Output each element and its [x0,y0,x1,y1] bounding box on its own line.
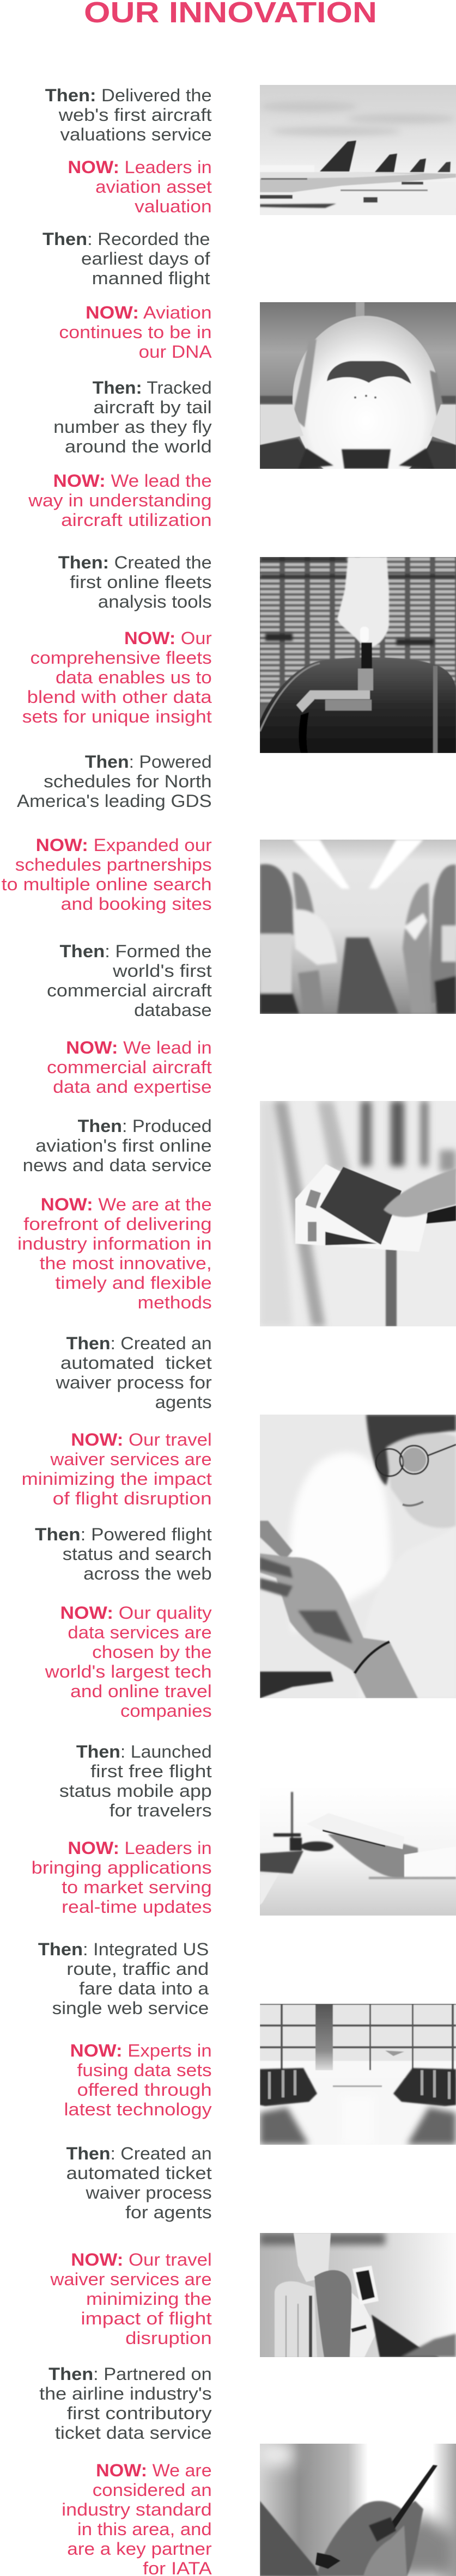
text: then automated ticket waiver process: automated ticket [60,1353,212,1373]
text: then first online news and data service: Then: Produced [78,1116,212,1136]
text: now industry standard key partner for IATA [62,2461,212,2576]
text: then world's first commercial aircraft database: Then: Formed the [60,941,212,961]
text: then earliest days of manned flight [42,229,210,288]
text: now forefront of delivering industry information: the most innovative, [40,1253,212,1273]
text: then tracked aircraft by tail number: around the world [65,437,212,456]
text: now leaders in valuation [68,157,212,216]
text: then first online fleets analysis tools: first online fleets [70,572,212,592]
text: now industry standard key partner for IATA: in this area, and [77,2519,212,2539]
text: then automated ticket waiver process for agents: waiver process [85,2183,212,2202]
text: now comprehensive fleets data: blend with other data [27,687,212,707]
text: now experts fusing data sets: latest technology [64,2100,212,2119]
text: then integrated US route, traffic and fare data: route, traffic and [66,1959,209,1979]
image: airport departure lounge windows [260,2004,456,2145]
text: now travel waiver services minimizing impact: waiver services are [50,2269,212,2289]
text: now quality data services chosen by tech companies: chosen by the [92,1642,212,1662]
text: then earliest days of manned flight: manned flight [92,268,210,288]
text: now leaders in valuation: NOW: Leaders in [68,157,212,177]
text: now way in understanding aircraft utilization: way in understanding [28,491,212,510]
text: then airline industry first contributory ticket data: the airline industry's [39,2384,212,2403]
text: then schedules for North America's GDS: America's leading GDS [17,791,212,811]
text: now industry standard key partner for IATA: industry standard [62,2500,212,2519]
text: now quality data services chosen by tech companies: data services are [68,1623,212,1642]
text: then earliest days of manned flight: Then: Recorded the [42,229,210,249]
text: now bringing applications to market: real-time updates [62,1897,212,1917]
text: then first online news and data service [23,1116,212,1175]
text: then integrated US route, traffic and fare data: fare data into a [79,1979,209,1998]
image: hand holding tablet at desk [260,1791,456,1916]
image: hand lifting suitcase before departures board [260,557,456,753]
text: then integrated US route, traffic and fare data: single web service [52,1998,209,2018]
text: then world's first commercial aircraft database: world's first [112,961,212,981]
text: now aviation in our DNA: NOW: Aviation [86,303,212,322]
text: now expanded schedules partnerships: schedules partnerships [15,855,212,874]
text: then tracked aircraft by tail number [53,378,212,456]
text: now forefront of delivering industry information: industry information in [17,1234,212,1253]
text: now bringing applications to market [32,1838,212,1917]
text: now travel waiver services minimizing impact: NOW: Our travel [71,2250,212,2269]
text: then tracked aircraft by tail number: Then: Tracked [93,378,212,397]
text: now travel waiver services flight disruption: minimizing the impact [22,1469,212,1489]
text: now commercial aircraft data and expertise: data and expertise [53,1077,212,1097]
text: now leaders in valuation: valuation [135,197,212,216]
text: then flight status and search [35,1525,212,1583]
text: now aviation in our DNA: continues to be in [59,322,212,342]
text: now industry standard key partner for IATA: NOW: We are [96,2461,212,2480]
text: then automated ticket waiver process for agents: for agents [125,2202,212,2222]
text: then first free flight status mobile app: status mobile app [59,1781,212,1801]
text: then world's first commercial aircraft database: commercial aircraft [47,981,212,1000]
text: now industry standard key partner for IATA: considered an [93,2480,212,2500]
text: now comprehensive fleets data: data enables us to [56,668,212,687]
text: now travel waiver services flight disruption: NOW: Our travel [71,1430,212,1449]
text: now aviation in our DNA: our DNA [139,342,212,362]
text: now quality data services chosen by tech companies: companies [120,1701,212,1721]
text: then automated ticket waiver process: agents [155,1392,212,1412]
text: now commercial aircraft data and expertise [47,1038,212,1097]
text: now forefront of delivering industry information: NOW: We are at the [41,1195,212,1214]
text: now bringing applications to market: bringing applications [32,1858,212,1877]
text: then flight status and search: status and search [63,1544,212,1564]
text: then automated ticket waiver process for agents: automated ticket [66,2163,212,2183]
text: now leaders in valuation: aviation asset [95,177,212,197]
text: then airline industry first contributory ticket data: ticket data service [55,2423,212,2443]
text: then web's first aircraft valuations: web's first aircraft [58,105,212,125]
text: then first online news and data service: aviation's first online [35,1136,212,1155]
text: now travel waiver services minimizing impact [50,2250,212,2348]
text: now forefront of delivering industry information [17,1195,212,1312]
text: then tracked aircraft by tail number: number as they fly [53,417,212,437]
text: now forefront of delivering industry information: forefront of delivering [23,1214,212,1234]
text: now way in understanding aircraft utilization: NOW: We lead the [53,471,212,491]
image: woman with glasses using a phone [260,1415,456,1698]
text: now bringing applications to market: to market serving [62,1877,212,1897]
text: then web's first aircraft valuations: valuations service [60,125,212,144]
text: now comprehensive fleets data [22,628,212,726]
text: then first free flight status mobile app [59,1742,212,1820]
text: then integrated US route, traffic and fare data [38,1939,209,2018]
text: then schedules for North America's GDS: Then: Powered [85,752,212,772]
text: now experts fusing data sets: offered through [77,2080,212,2100]
text: now bringing applications to market: NOW: Leaders in [68,1838,212,1858]
text: now travel waiver services minimizing impact: disruption [125,2328,212,2348]
text: now quality data services chosen by tech companies: and online travel [70,1681,212,1701]
text: now experts fusing data sets: fusing data sets [77,2060,212,2080]
text: then automated ticket waiver process: waiver process for [55,1373,212,1392]
text: then airline industry first contributory ticket data [39,2364,212,2443]
text: then world's first commercial aircraft database: database [134,1000,212,1020]
text: now comprehensive fleets data: comprehensive fleets [31,648,212,668]
text: now industry standard key partner for IATA: are a key partner [67,2539,212,2559]
text: now way in understanding aircraft utilization [28,471,212,530]
text: then web's first aircraft valuations [45,85,212,144]
text: now aviation in our DNA [59,303,212,362]
text: then flight status and search: Then: Powered flight [35,1525,212,1544]
text: then first online fleets analysis tools: analysis tools [98,592,212,611]
text: now expanded schedules partnerships: to multiple online search [2,874,212,894]
text: then tracked aircraft by tail number: aircraft by tail [93,397,212,417]
image: traveller with suitcase and phone [260,2233,456,2357]
text: now travel waiver services minimizing impact: impact of flight [81,2309,212,2328]
text: then first free flight status mobile app: Then: Launched [76,1742,212,1761]
image: row of parked aircraft tails [260,85,456,215]
text: now forefront of delivering industry information: timely and flexible [55,1273,212,1293]
text: then airline industry first contributory ticket data: Then: Partnered on [48,2364,212,2384]
text: now quality data services chosen by tech companies [45,1603,212,1721]
image: hands using a phone by aircraft window [260,2444,456,2576]
text: then schedules for North America's GDS [17,752,212,811]
text: now experts fusing data sets: NOW: Experts in [70,2041,212,2060]
text: now expanded schedules partnerships: and booking sites [61,894,212,914]
text: then airline industry first contributory ticket data: first contributory [67,2403,212,2423]
text: then integrated US route, traffic and fare data: Then: Integrated US [38,1939,209,1959]
text: now experts fusing data sets [64,2041,212,2119]
text: now expanded schedules partnerships [2,835,212,914]
text: now travel waiver services flight disruption: waiver services are [50,1449,212,1469]
text: now quality data services chosen by tech companies: world's largest tech [45,1662,212,1681]
text: then flight status and search: across the web [83,1564,212,1583]
text: then automated ticket waiver process for agents [66,2144,212,2222]
text: now comprehensive fleets data: NOW: Our [124,628,212,648]
text: then first online fleets analysis tools: Then: Created the [58,553,212,572]
text: now travel waiver services minimizing impact: minimizing the [86,2289,212,2309]
text: now comprehensive fleets data: sets for unique insight [22,707,212,726]
text: then first free flight status mobile app: for travelers [110,1801,212,1820]
text: now way in understanding aircraft utilization: aircraft utilization [61,510,212,530]
text: then first free flight status mobile app: first free flight [90,1761,212,1781]
image: airliner front view [260,302,456,469]
text: then automated ticket waiver process: Then: Created an [66,1333,212,1353]
image: aircraft cabin aisle [260,840,456,1014]
text: now commercial aircraft data and expertise: NOW: We lead in [66,1038,212,1057]
text: now travel waiver services flight disruption [22,1430,212,1508]
text: now travel waiver services flight disruption: of flight disruption [53,1489,212,1508]
text: now expanded schedules partnerships: NOW: Expanded our [36,835,212,855]
text: then earliest days of manned flight: earliest days of [81,249,210,268]
image: hand holding passport and boarding passes [260,1101,456,1326]
text: then automated ticket waiver process [55,1333,212,1412]
text: then schedules for North America's GDS: schedules for North [44,772,212,791]
text: now forefront of delivering industry information: methods [137,1293,212,1312]
text: then world's first commercial aircraft database [47,941,212,1020]
text: then first online news and data service: news and data service [23,1155,212,1175]
text: now quality data services chosen by tech companies: NOW: Our quality [60,1603,212,1623]
text: then first online fleets analysis tools [58,553,212,611]
text: then web's first aircraft valuations: Then: Delivered the [45,85,212,105]
text: now commercial aircraft data and expertise: commercial aircraft [47,1057,212,1077]
text: then automated ticket waiver process for agents: Then: Created an [66,2144,212,2163]
